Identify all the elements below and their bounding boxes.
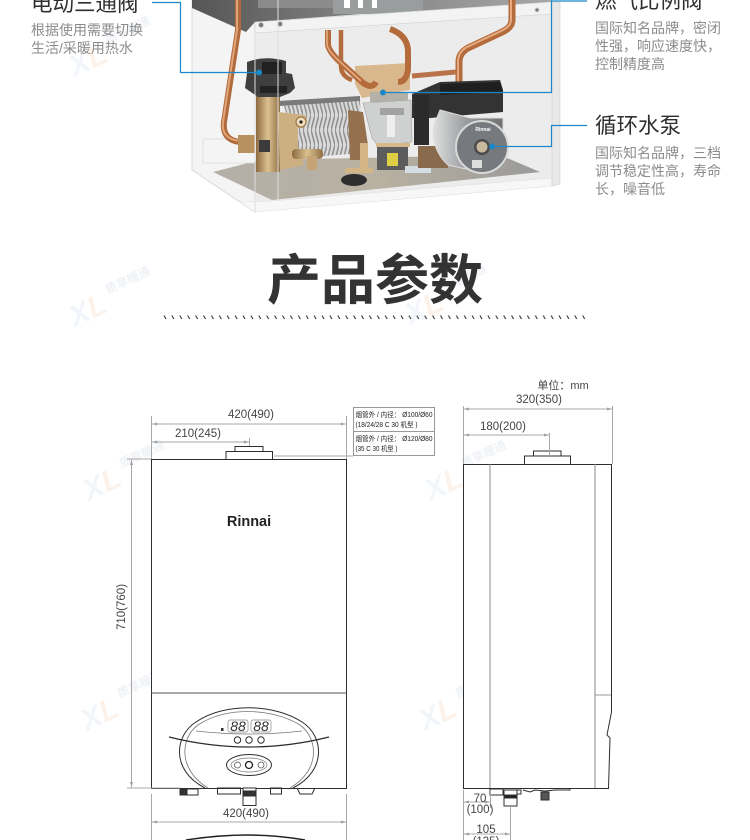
watermarks: L (425, 49, 455, 87)
control panel (169, 708, 329, 788)
watermarks: X (74, 698, 110, 738)
white front bottom band (240, 178, 552, 212)
watermarks: 质享暖通 (103, 263, 153, 297)
brand logo: Rinnai (227, 514, 271, 530)
side view dimensions: 70 (474, 793, 486, 805)
bottom connectors (180, 788, 315, 806)
watermarks: L (82, 37, 112, 75)
side view dimensions: 105 (476, 824, 496, 836)
copper pipes (223, 0, 512, 142)
watermarks: L (94, 691, 124, 729)
side view dimensions: 180(200) (480, 421, 526, 433)
flue note box: 烟管外 / 内径： Ø100/Ø60 (356, 410, 433, 419)
circulation pump (412, 80, 508, 173)
white top beam (255, 2, 552, 33)
watermarks: L (418, 285, 448, 323)
watermarks: 质享暖通 (103, 13, 153, 47)
front view dimensions: 420(490) (228, 409, 274, 421)
watermarks: X (412, 698, 448, 738)
watermarks: X (62, 44, 98, 84)
watermarks: L (432, 691, 462, 729)
floor plate (213, 155, 540, 200)
illustration: boiler internals (192, 0, 560, 212)
control panel: 88 (253, 718, 269, 734)
front view drawing (151, 446, 347, 806)
watermarks: L (96, 461, 126, 499)
front view dimensions (116, 409, 346, 840)
front view dimensions: 420(490) (223, 808, 269, 820)
callout: gas proportional valve: 控制精度高 (595, 56, 665, 72)
title underline (163, 315, 587, 321)
flue note box: (35 C 30 机型 ) (356, 444, 398, 453)
callout: gas proportional valve: 性强，响应速度快， (595, 38, 721, 54)
watermarks: 质享暖通 (453, 667, 503, 701)
callout: gas proportional valve (595, 0, 721, 72)
control panel: 88 (230, 718, 246, 734)
callout: circulation pump: 长，噪音低 (595, 181, 665, 197)
front view dimensions: 710(760) (116, 584, 128, 630)
side connectors (490, 788, 570, 806)
title: 产品参数 (267, 251, 483, 311)
callout: circulation pump (595, 114, 721, 197)
side view dimensions: (100) (467, 804, 494, 816)
callout: circulation pump: 国际知名品牌，三档 (595, 145, 721, 161)
flue (226, 446, 272, 459)
brass manifold (355, 63, 410, 98)
watermarks (61, 13, 517, 738)
watermarks: X (405, 56, 441, 96)
callout: three-way valve: 生活/采暖用热水 (31, 40, 133, 56)
glass front edges (255, 0, 278, 212)
upper grey hardware (258, 0, 423, 14)
side view drawing (464, 451, 612, 806)
callout: gas proportional valve: 国际知名品牌，密闭 (595, 20, 721, 36)
circulation pump: Rinnai (475, 127, 491, 133)
leader lines (152, 1, 587, 146)
bottom view arc (186, 835, 305, 840)
callout: three-way valve (31, 0, 143, 56)
upper band (192, 0, 552, 32)
watermarks: X (418, 468, 454, 508)
callout: circulation pump: 调节稳定性高，寿命 (595, 163, 721, 179)
flue note box: 烟管外 / 内径： Ø120/Ø80 (356, 434, 433, 443)
watermarks: 质享暖通 (446, 25, 496, 59)
front view dimensions: 210(245) (175, 428, 221, 440)
panel divider (151, 692, 347, 694)
left lower rail (203, 139, 255, 163)
watermarks: L (438, 461, 468, 499)
side view dimensions (464, 394, 612, 840)
watermarks: 质享暖通 (459, 437, 509, 471)
heat exchanger (278, 96, 362, 158)
watermarks: 质享暖通 (439, 261, 489, 295)
gas proportional valve (341, 92, 431, 186)
electric three-way valve (238, 58, 323, 172)
watermarks: X (62, 294, 98, 334)
unit label: 单位：mm (537, 378, 589, 392)
callout: three-way valve: 根据使用需要切换 (31, 22, 143, 38)
flue note box: (18/24/28 C 30 机型 ) (356, 420, 418, 429)
leader dots (256, 70, 495, 150)
flue note box (274, 408, 434, 456)
side flue (524, 451, 570, 464)
watermarks: L (82, 287, 112, 325)
watermarks: X (398, 292, 434, 332)
beam screws (258, 5, 558, 28)
cabinet left side (192, 0, 255, 212)
right side strip (552, 2, 560, 186)
watermarks: 质享暖通 (115, 667, 165, 701)
side view body (464, 464, 612, 788)
watermarks: 质享暖通 (117, 437, 167, 471)
cabinet back wall (255, 14, 552, 212)
callout: circulation pump: 循环水泵 (595, 114, 681, 138)
side view dimensions: 320(350) (516, 394, 562, 406)
front view body (152, 460, 346, 788)
watermarks: X (76, 468, 112, 508)
